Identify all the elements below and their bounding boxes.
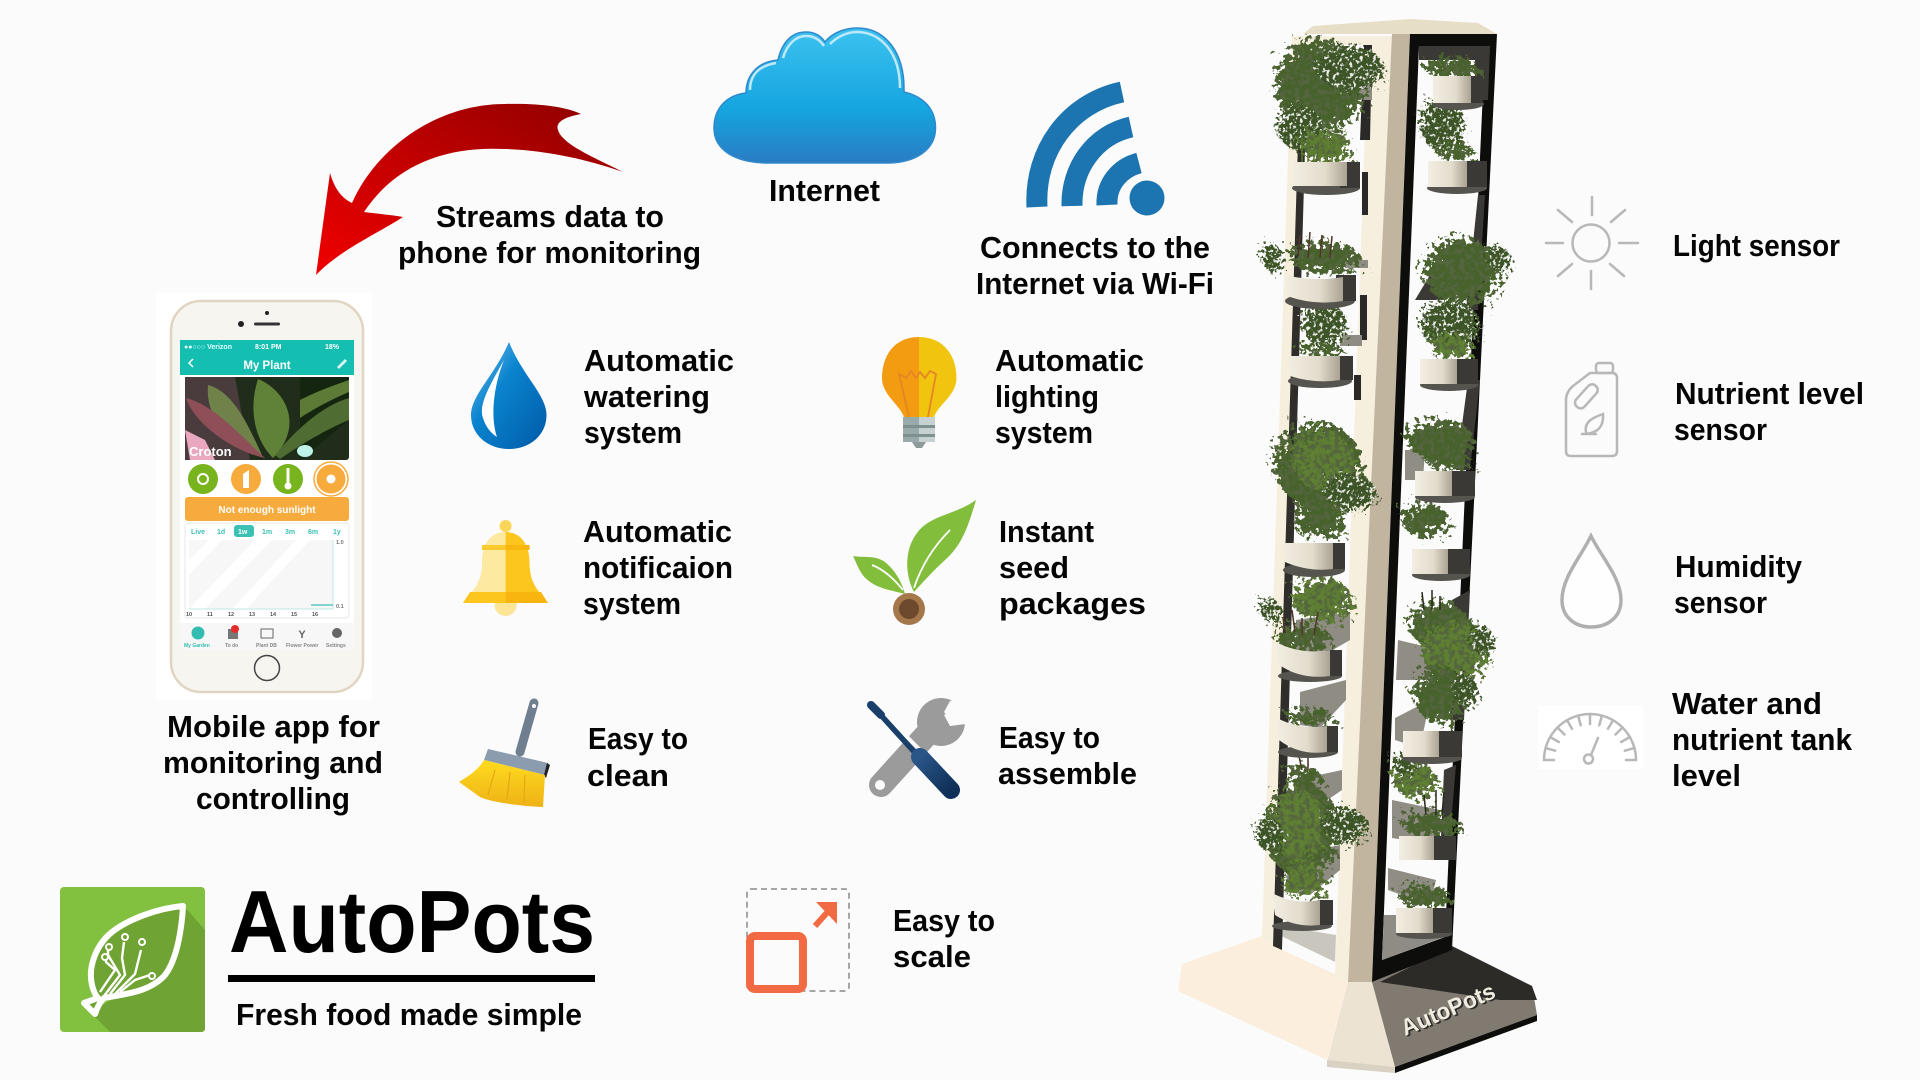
tower base	[1178, 936, 1537, 1073]
foliage: left side	[1256, 39, 1384, 895]
text: wifi: Connects to the	[980, 230, 1210, 265]
phone header: 8:01 PM	[255, 344, 282, 351]
logo wordmark	[228, 872, 595, 1032]
sunlight chart: 1y	[333, 529, 341, 536]
sensor: nutrient level	[1566, 363, 1864, 456]
feature: easy to scale: scale	[893, 939, 971, 974]
window floors	[1273, 925, 1336, 962]
feature: automatic notification: Automatic	[583, 514, 732, 549]
sunlight chart: 14	[270, 612, 277, 618]
sunlight chart: 16	[312, 612, 318, 618]
sensor: nutrient level: Nutrient level	[1675, 376, 1864, 411]
sunlight chart: 11	[207, 612, 213, 618]
phone tab bar: My Garden	[184, 643, 210, 649]
sunlight chart: 15	[291, 612, 297, 618]
feature: automatic lighting	[882, 337, 1144, 450]
sunlight chart: 1d	[217, 529, 225, 536]
sensor: nutrient level: sensor	[1674, 412, 1767, 447]
feature: easy to assemble: Easy to	[999, 720, 1100, 755]
sensor: tank level: nutrient tank	[1672, 722, 1853, 757]
feature: easy to scale: Easy to	[893, 903, 995, 938]
phone tab bar	[180, 623, 354, 650]
feature: easy to clean: clean	[587, 758, 669, 793]
pots: right side	[1396, 76, 1487, 939]
foliage: right side	[1393, 58, 1510, 909]
text: streams data	[398, 199, 701, 270]
feature: automatic lighting: lighting	[995, 379, 1099, 414]
icon: sun	[1546, 197, 1638, 289]
feature: automatic watering	[471, 342, 734, 450]
plant photo	[185, 377, 349, 460]
label: mobile app: controlling	[196, 781, 350, 816]
right windows	[1382, 46, 1485, 960]
tower base: AutoPots	[1399, 979, 1501, 1042]
alert banner	[185, 497, 349, 521]
label: mobile app	[163, 709, 383, 816]
phone tab bar: To do	[225, 643, 238, 649]
phone tab bar: Y	[298, 629, 306, 641]
sensor: tank level	[1538, 686, 1853, 793]
sensor: tank level: Water and	[1672, 686, 1822, 721]
feature: automatic lighting: system	[995, 415, 1093, 450]
phone tab bar: Plant DB	[256, 643, 277, 649]
text: streams data: phone for monitoring	[398, 235, 701, 270]
icon: cloud	[714, 28, 936, 163]
sunlight chart: 1m	[262, 529, 272, 536]
phone header	[180, 340, 354, 375]
logo mark	[60, 887, 205, 1032]
text: streams data: Streams data to	[436, 199, 664, 234]
sensor: humidity	[1562, 536, 1803, 627]
icon: scale	[747, 889, 849, 991]
sunlight chart: 1.0	[336, 540, 344, 546]
logo wordmark: Fresh food made simple	[236, 997, 582, 1032]
icon: bell	[463, 520, 548, 616]
sunlight chart: 3m	[285, 529, 295, 536]
phone header: ●●○○○ Verizon	[184, 344, 232, 351]
icon: tools	[871, 698, 966, 790]
icon: wifi	[1037, 92, 1164, 216]
sunlight chart: 6m	[308, 529, 318, 536]
feature: easy to assemble: assemble	[998, 756, 1137, 791]
phone mockup	[156, 293, 372, 700]
feature: automatic notification: notificaion	[583, 550, 733, 585]
sensor: humidity: Humidity	[1675, 549, 1803, 584]
sensor: tank level: level	[1672, 758, 1741, 793]
feature: easy to assemble	[871, 698, 1137, 791]
icon: sprout	[853, 500, 976, 625]
sensor: humidity: sensor	[1674, 585, 1767, 620]
label: internet: Internet	[769, 173, 880, 208]
icon: water drop	[471, 342, 546, 449]
icon: humidity drop	[1562, 536, 1621, 627]
sunlight chart: 1w	[238, 529, 248, 536]
feature: automatic watering: system	[584, 415, 682, 450]
pots: left side	[1272, 162, 1360, 931]
phone tab bar: Flower Power	[286, 643, 319, 649]
feature: automatic lighting: Automatic	[995, 343, 1144, 378]
icon: light bulb	[882, 337, 956, 448]
phone header: My Plant	[243, 360, 291, 372]
feature: automatic notification: system	[583, 586, 681, 621]
tower column	[1262, 19, 1497, 982]
label: mobile app: monitoring and	[163, 745, 383, 780]
sunlight chart: 0.1	[336, 604, 344, 610]
sunlight chart: 10	[186, 612, 192, 618]
feature: instant seed: Instant	[999, 514, 1094, 549]
status icons	[188, 462, 348, 496]
feature: instant seed: seed	[999, 550, 1069, 585]
icon: nutrient bottle	[1566, 363, 1617, 456]
phone tab bar: Settings	[326, 643, 346, 649]
feature: automatic watering: Automatic	[584, 343, 734, 378]
feature: instant seed: packages	[999, 586, 1146, 621]
icon: gauge	[1538, 706, 1643, 769]
alert banner: Not enough sunlight	[218, 505, 316, 516]
struts and shelves	[1273, 45, 1308, 950]
left windows	[1273, 45, 1368, 974]
text: wifi: Internet via Wi-Fi	[976, 266, 1214, 301]
label: mobile app: Mobile app for	[167, 709, 380, 744]
feature: instant seed	[853, 500, 1146, 625]
feature: easy to scale	[747, 889, 995, 991]
tower base: AutoPots	[1397, 978, 1499, 1041]
arrow: streams data to phone	[316, 104, 623, 275]
logo wordmark: AutoPots	[229, 872, 595, 971]
sensor: light: Light sensor	[1673, 228, 1840, 263]
sunlight chart: Live	[191, 529, 205, 536]
plant photo: Croton	[189, 444, 232, 459]
text: wifi	[976, 230, 1214, 301]
sunlight chart: 13	[249, 612, 255, 618]
feature: easy to clean: Easy to	[588, 721, 688, 756]
icon: broom	[459, 703, 550, 807]
feature: automatic watering: watering	[583, 379, 710, 414]
feature: automatic notification	[463, 514, 733, 621]
sunlight chart: 12	[228, 612, 234, 618]
sensor: light	[1546, 197, 1840, 289]
sunlight chart	[185, 523, 349, 618]
phone header: 18%	[325, 344, 340, 351]
tower illustration	[1178, 19, 1537, 1073]
feature: easy to clean	[459, 703, 688, 807]
